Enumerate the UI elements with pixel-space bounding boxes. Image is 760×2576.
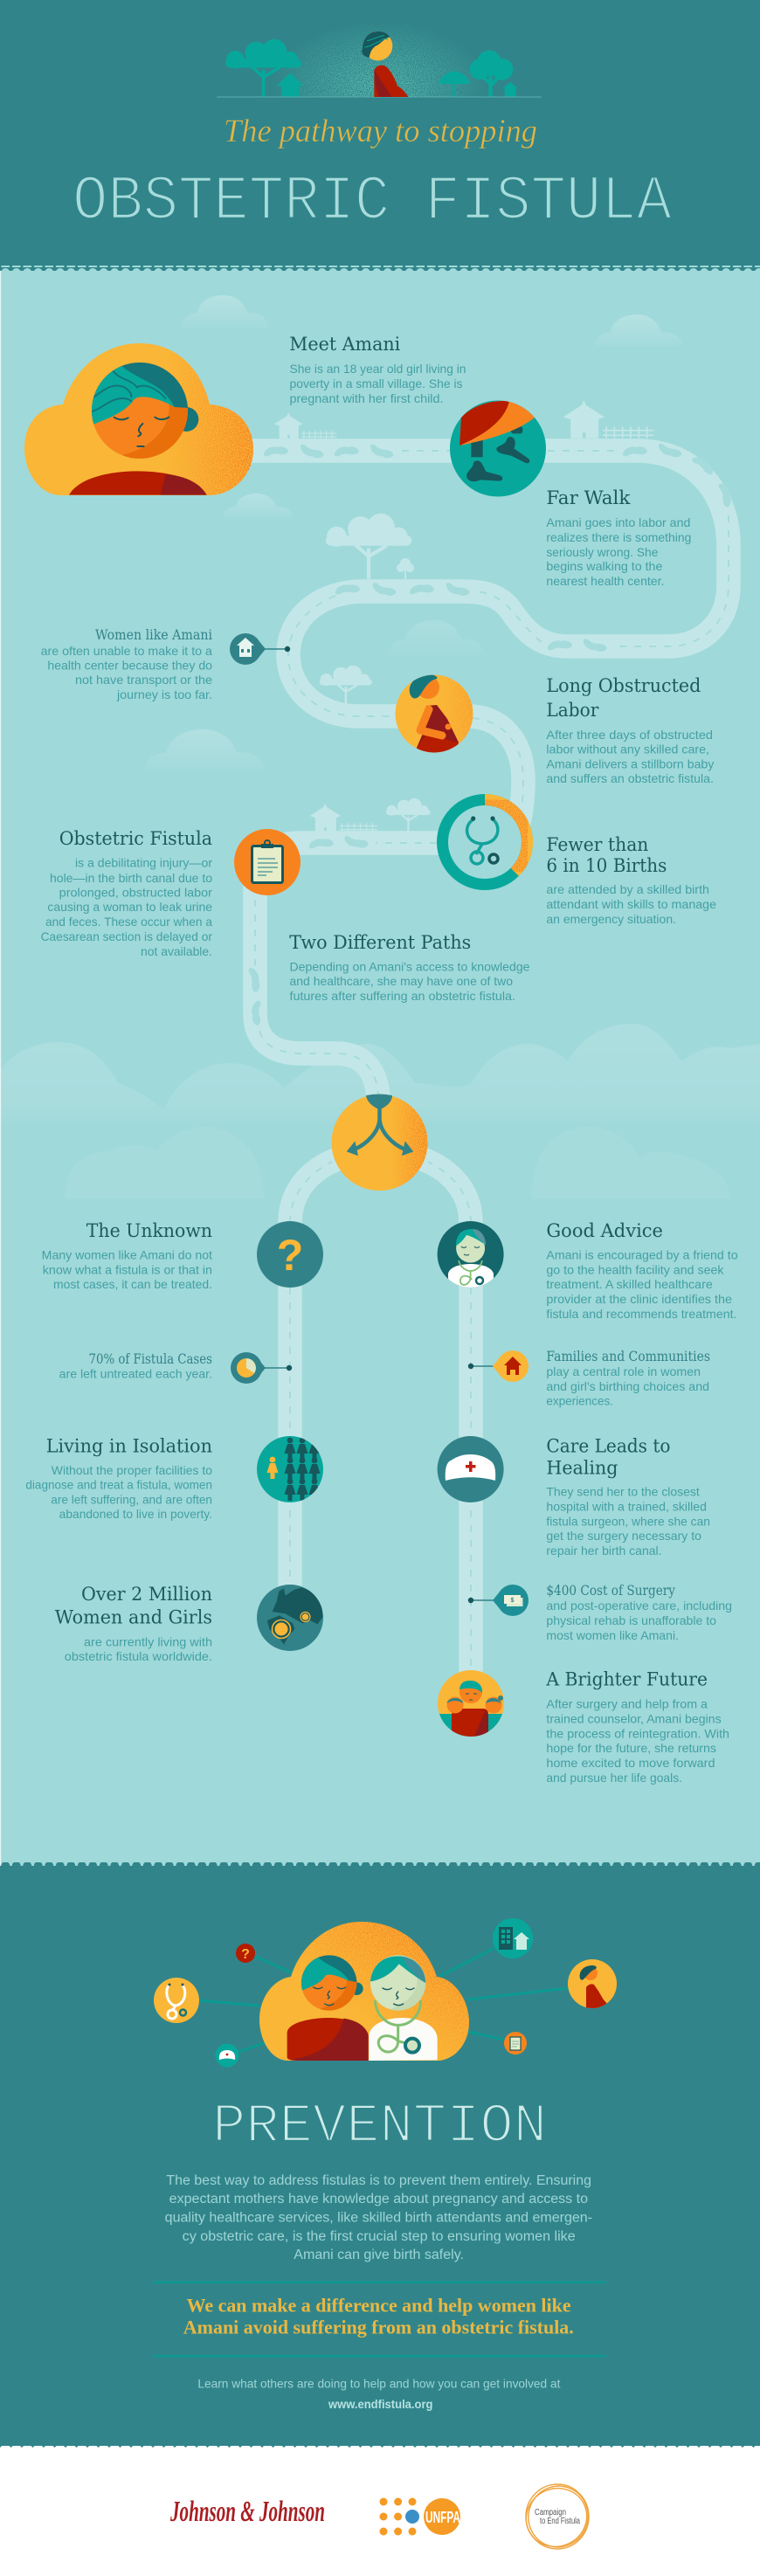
text: Over 2 Million Women and Girls: are currently living with bbox=[84, 1635, 212, 1649]
logo: UNFPA: UNFPA bbox=[425, 2509, 460, 2526]
text: Good Advice: Amani is encouraged by a friend to bbox=[546, 1249, 738, 1261]
text: Obstetric Fistula: Obstetric Fistula bbox=[59, 828, 212, 850]
text: 70% of Fistula Cases: are left untreated each year. bbox=[59, 1368, 212, 1380]
text: 70% of Fistula Cases bbox=[59, 1350, 212, 1380]
text: Meet Amani: pregnant with her first child. bbox=[290, 392, 444, 405]
background clouds bbox=[0, 295, 760, 1198]
icon: clipboard bbox=[234, 829, 301, 895]
text: Living in Isolation: Without the proper facilities to bbox=[52, 1464, 212, 1477]
text: Care Leads to Healing: fistula surgeon, where she can bbox=[546, 1515, 710, 1529]
icon: stethoscope ring chart bbox=[442, 800, 528, 884]
icon: brighter future family bbox=[437, 1670, 505, 1740]
text: Living in Isolation: diagnose and treat a fistula, women bbox=[25, 1478, 212, 1492]
text: Living in Isolation: abandoned to live in poverty. bbox=[59, 1508, 212, 1521]
logo: Campaign to End Fistula: Campaign bbox=[535, 2508, 566, 2517]
panel: header background bbox=[0, 0, 760, 271]
heading: Prevention: PREVENTION bbox=[212, 2096, 547, 2158]
text: Women like Amani: health center because they do bbox=[47, 659, 212, 673]
text: A Brighter Future: home excited to move forward bbox=[546, 1757, 715, 1770]
callout: make a difference: We can make a difference and help women like bbox=[187, 2295, 571, 2317]
text: Over 2 Million Women and Girls bbox=[55, 1584, 212, 1663]
text: A Brighter Future: A Brighter Future bbox=[545, 1668, 708, 1690]
text: Care Leads to Healing: hospital with a trained, skilled bbox=[546, 1501, 707, 1513]
text: Two Different Paths: Two Different Paths bbox=[289, 932, 471, 954]
callout: make a difference bbox=[153, 2282, 606, 2357]
text: Fewer than 6 in 10 Births bbox=[546, 834, 716, 926]
panel: journey background bbox=[0, 271, 760, 1866]
text: $400 Cost of Surgery bbox=[546, 1582, 732, 1642]
text: Far Walk: Amani goes into labor and bbox=[546, 516, 690, 529]
text: Long Obstructed Labor: and suffers an obstetric fistula. bbox=[546, 772, 714, 785]
text: Two Different Paths: Depending on Amani's access to knowledge bbox=[290, 961, 529, 973]
icon: nurse cap bbox=[438, 1436, 504, 1502]
road centre dashes bbox=[255, 451, 729, 1668]
text: Care Leads to Healing: Care Leads to bbox=[546, 1436, 671, 1458]
icon: doctor bbox=[438, 1221, 504, 1288]
text: Far Walk: nearest health center. bbox=[546, 575, 664, 588]
title: Obstetric Fistula: OBSTETRIC FISTULA bbox=[73, 166, 673, 238]
text: prevention paragraph: The best way to address fistulas is to prevent them entirely. Ensuring bbox=[166, 2173, 591, 2188]
text: Families and Communities: and girl's birthing choices and bbox=[546, 1380, 709, 1393]
text: Good Advice: treatment. A skilled healthcare bbox=[546, 1278, 713, 1291]
text: Good Advice bbox=[546, 1220, 738, 1321]
icon: header tree left bbox=[225, 39, 301, 97]
text: Women like Amani bbox=[41, 626, 212, 701]
text: Care Leads to Healing: Healing bbox=[546, 1457, 618, 1480]
text: Far Walk: realizes there is something bbox=[546, 531, 691, 544]
text: Obstetric Fistula: hole—in the birth canal due to bbox=[50, 872, 212, 885]
text: $400 Cost of Surgery: and post-operative care, including bbox=[546, 1599, 732, 1613]
text: Long Obstructed Labor: After three days of obstructed bbox=[546, 729, 713, 742]
text: Two Different Paths bbox=[289, 932, 529, 1003]
text: The Unknown: The Unknown bbox=[86, 1220, 212, 1242]
text: Good Advice: go to the health facility and seek bbox=[546, 1263, 724, 1277]
text: Fewer than 6 in 10 Births: an emergency situation. bbox=[546, 913, 676, 926]
icon: far walk feet bbox=[450, 400, 546, 496]
text: Long Obstructed Labor: Long Obstructed bbox=[546, 675, 701, 697]
text: Two Different Paths: futures after suffering an obstetric fistula. bbox=[290, 990, 515, 1003]
text: Meet Amani: She is an 18 year old girl living in bbox=[290, 363, 466, 376]
text: Obstetric Fistula: not available. bbox=[141, 945, 212, 958]
text: Obstetric Fistula: prolonged, obstructed labor bbox=[59, 886, 212, 900]
text: Far Walk: seriously wrong. She bbox=[546, 546, 658, 559]
text: learn more bbox=[197, 2378, 561, 2411]
text: Good Advice: provider at the clinic identifies the bbox=[546, 1293, 732, 1306]
text: Women like Amani: not have transport or the bbox=[75, 673, 212, 687]
text: Fewer than 6 in 10 Births: are attended by a skilled birth bbox=[546, 883, 709, 896]
icon: Amani portrait cloud bbox=[24, 343, 253, 495]
text: A Brighter Future: trained counselor, Amani begins bbox=[546, 1712, 722, 1725]
icon: hospital and clinic badge bbox=[493, 1918, 533, 1958]
icon: isolated woman bbox=[257, 1436, 323, 1502]
text: Fewer than 6 in 10 Births: 6 in 10 Births bbox=[546, 855, 667, 877]
text: Two Different Paths: and healthcare, she may have one of two bbox=[290, 975, 513, 988]
icon: money pin bbox=[468, 1585, 529, 1616]
text: Families and Communities: Families and Communities bbox=[546, 1348, 710, 1364]
text: Families and Communities: experiences. bbox=[546, 1394, 613, 1408]
text: Meet Amani bbox=[289, 334, 466, 405]
text: Far Walk: begins walking to the bbox=[546, 560, 662, 573]
text: The Unknown: most cases, it can be treated. bbox=[53, 1278, 212, 1291]
text: A Brighter Future: hope for the future, she returns bbox=[546, 1742, 716, 1755]
doctor figure bbox=[369, 1955, 438, 2061]
text: Good Advice: fistula and recommends treatment. bbox=[546, 1308, 737, 1321]
text: prevention paragraph: Amani can give birth safely. bbox=[294, 2248, 464, 2262]
icon: health center pin bbox=[230, 633, 290, 665]
logo: Campaign to End Fistula: to End Fistula bbox=[540, 2517, 580, 2526]
text: Fewer than 6 in 10 Births: Fewer than bbox=[546, 834, 649, 856]
title: The pathway to stopping: The pathway to stopping bbox=[224, 114, 537, 149]
text: $400 Cost of Surgery: $400 Cost of Surgery bbox=[546, 1582, 675, 1599]
logo: Campaign to End Fistula bbox=[516, 2477, 597, 2557]
text: A Brighter Future: and pursue her life goals. bbox=[546, 1771, 682, 1785]
icon: header tree right bbox=[470, 51, 513, 97]
text: prevention paragraph: cy obstetric care, is the first crucial step to ensuring women like bbox=[183, 2229, 576, 2244]
text: Meet Amani: Meet Amani bbox=[289, 334, 400, 356]
callout: make a difference: Amani avoid suffering from an obstetric fistula. bbox=[183, 2317, 574, 2338]
text: Obstetric Fistula bbox=[41, 828, 212, 958]
icon: question mark: ? bbox=[277, 1231, 303, 1280]
icon: woman in obstructed labor bbox=[395, 674, 473, 760]
text: The Unknown: Many women like Amani do not bbox=[42, 1249, 212, 1261]
icon: nurse badge bbox=[215, 2044, 239, 2067]
text: prevention paragraph: expectant mothers have knowledge about pregnancy and access to bbox=[169, 2192, 588, 2207]
text: learn more: Learn what others are doing to help and how you can get involved at bbox=[197, 2378, 561, 2390]
text: $400 Cost of Surgery: physical rehab is unafforable to bbox=[546, 1614, 716, 1627]
text: Women like Amani: journey is too far. bbox=[116, 688, 212, 701]
logo: Johnson & Johnson: Johnson & Johnson bbox=[169, 2496, 325, 2528]
pale scenery: trees and houses bbox=[274, 400, 653, 832]
panel: prevention background bbox=[0, 1866, 760, 2448]
text: Living in Isolation: are left suffering, and are often bbox=[51, 1494, 212, 1506]
icon: woman badge bbox=[568, 1959, 617, 2009]
text: $400 Cost of Surgery: most women like Amani. bbox=[546, 1629, 679, 1642]
footprints along the road bbox=[248, 443, 732, 1026]
icon: header house right bbox=[502, 82, 518, 97]
icon: money pin: $ bbox=[511, 1598, 515, 1604]
text: A Brighter Future: After surgery and help from a bbox=[546, 1698, 708, 1711]
text: Good Advice: Good Advice bbox=[546, 1220, 663, 1242]
icon: pie chart pin bbox=[231, 1352, 292, 1384]
icon: family house pin bbox=[468, 1350, 529, 1382]
text: Women like Amani: Women like Amani bbox=[95, 626, 212, 643]
text: learn more: www.endfistula.org bbox=[328, 2398, 433, 2411]
text: Obstetric Fistula: and feces. These occur when a bbox=[45, 915, 212, 929]
icon: header small tree bbox=[439, 72, 470, 97]
text: Meet Amani: poverty in a small village. She is bbox=[290, 377, 463, 390]
icon: stethoscope badge bbox=[154, 1978, 199, 2023]
prevention connector lines bbox=[199, 1948, 568, 2052]
text: prevention paragraph bbox=[165, 2173, 592, 2262]
icon: globe bbox=[257, 1585, 323, 1651]
icon: header house left bbox=[277, 73, 303, 97]
Amani figure bbox=[287, 1952, 369, 2061]
text: Long Obstructed Labor bbox=[546, 675, 715, 785]
text: Obstetric Fistula: Caesarean section is delayed or bbox=[41, 930, 212, 943]
text: Long Obstructed Labor: Labor bbox=[546, 700, 599, 722]
icon: clipboard badge bbox=[504, 2032, 527, 2055]
text: Families and Communities: play a central role in women bbox=[546, 1365, 701, 1378]
text: Obstetric Fistula: is a debilitating injury—or bbox=[75, 856, 212, 870]
text: Care Leads to Healing: repair her birth canal. bbox=[546, 1544, 662, 1557]
text: Care Leads to Healing: They send her to the closest bbox=[546, 1485, 700, 1499]
text: A Brighter Future bbox=[545, 1668, 729, 1785]
text: prevention paragraph: quality healthcare services, like skilled birth attendants and emergen- bbox=[165, 2210, 592, 2226]
text: Long Obstructed Labor: labor without any skilled care, bbox=[546, 742, 709, 756]
logo: UNFPA bbox=[379, 2498, 460, 2535]
text: Far Walk: Far Walk bbox=[546, 487, 631, 509]
icon: question badge bbox=[236, 1944, 255, 1963]
text: 70% of Fistula Cases: 70% of Fistula Cases bbox=[89, 1350, 212, 1367]
text: Over 2 Million Women and Girls: Women and Girls bbox=[55, 1607, 212, 1629]
road: upper winding path bbox=[236, 451, 729, 1682]
text: Over 2 Million Women and Girls: obstetric fistula worldwide. bbox=[65, 1650, 212, 1663]
text: Women like Amani: are often unable to make it to a bbox=[41, 645, 212, 658]
text: Long Obstructed Labor: Amani delivers a stillborn baby bbox=[546, 758, 715, 770]
text: A Brighter Future: the process of reintegration. With bbox=[546, 1727, 729, 1740]
icon: question mark bbox=[257, 1221, 323, 1288]
icon: header pregnant woman bbox=[362, 31, 408, 97]
text: Living in Isolation bbox=[25, 1436, 212, 1521]
text: Far Walk bbox=[546, 487, 691, 588]
icon: question badge: ? bbox=[241, 1947, 250, 1962]
text: Care Leads to Healing: get the surgery necessary to bbox=[546, 1530, 701, 1543]
text: Obstetric Fistula: causing a woman to leak urine bbox=[47, 901, 212, 914]
icon: prevention cloud with Amani and doctor bbox=[259, 1922, 469, 2061]
text: The Unknown: know what a fistula is or that in bbox=[43, 1263, 212, 1277]
text: Living in Isolation: Living in Isolation bbox=[46, 1436, 212, 1458]
text: Fewer than 6 in 10 Births: attendant with skills to manage bbox=[546, 898, 716, 911]
icon: fork in the road bbox=[332, 1094, 428, 1191]
text: The Unknown bbox=[42, 1220, 212, 1291]
text: Care Leads to Healing bbox=[546, 1436, 710, 1557]
text: Over 2 Million Women and Girls: Over 2 Million bbox=[81, 1584, 212, 1606]
header illustration bbox=[217, 30, 542, 98]
text: Families and Communities bbox=[546, 1348, 710, 1408]
